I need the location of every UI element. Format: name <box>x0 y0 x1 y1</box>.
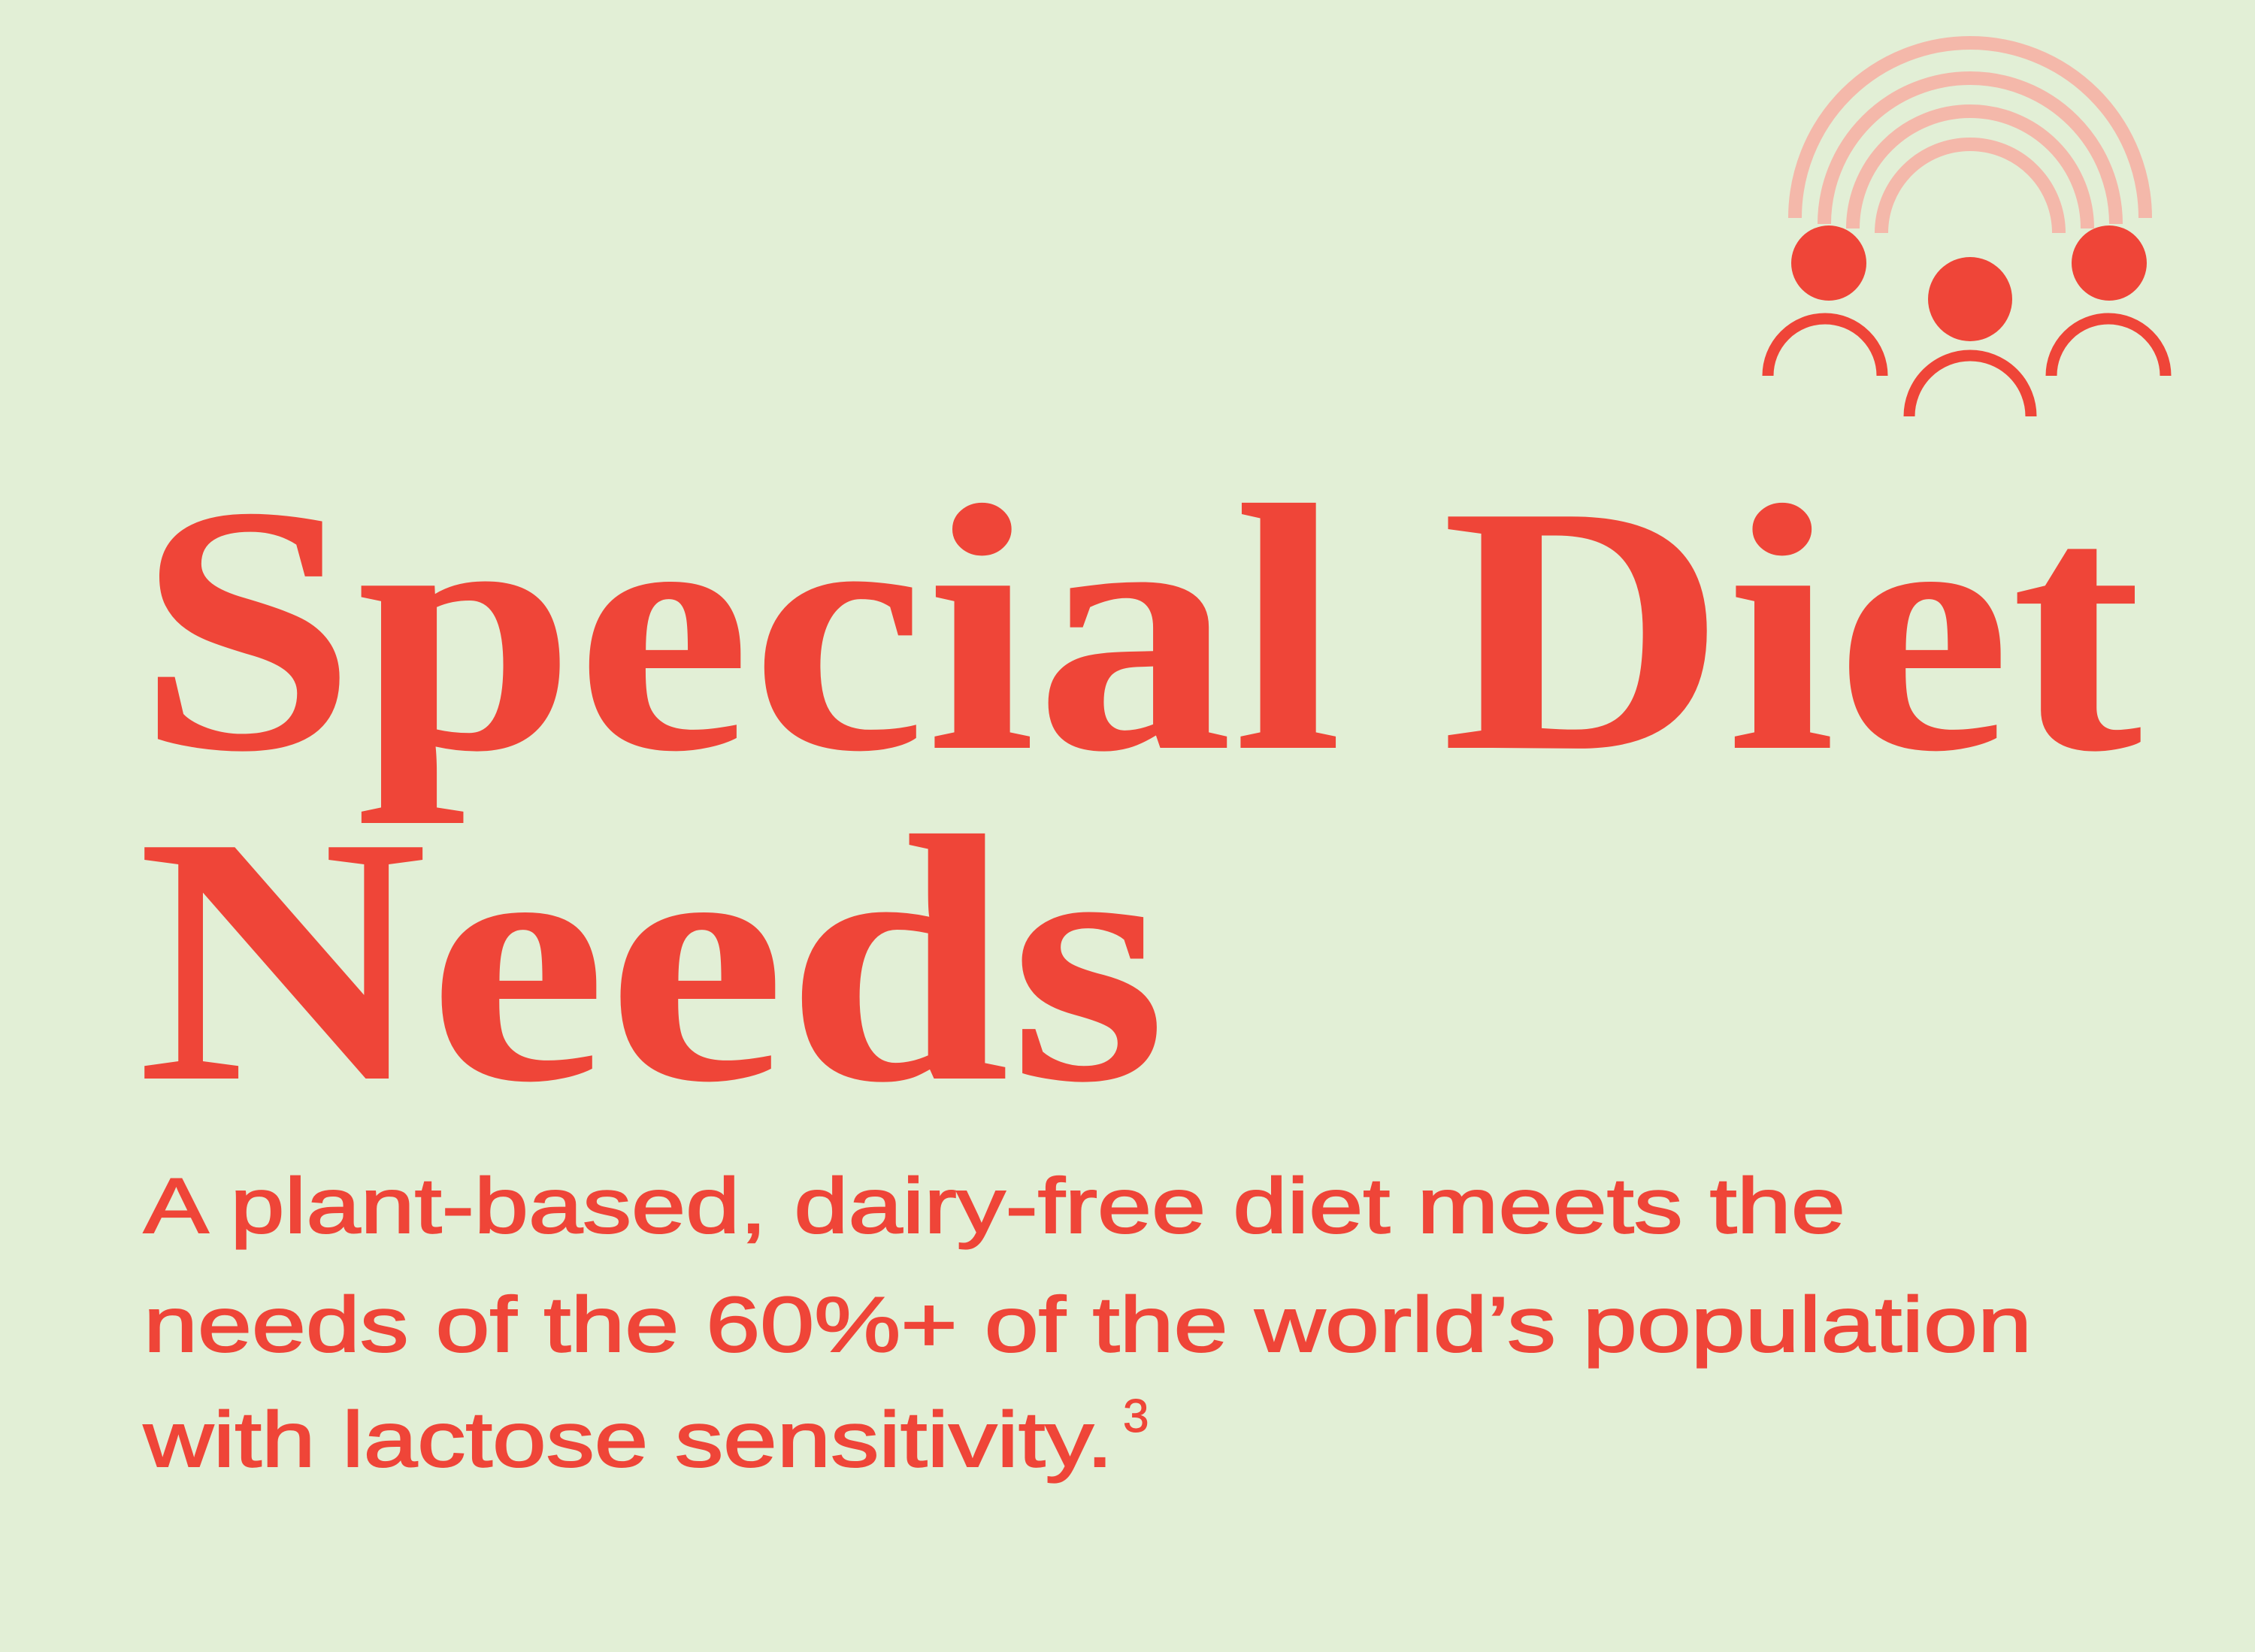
icon: rainbow with people <box>1768 43 2166 416</box>
subtitle text block: needs of the 60%+ of the world’s population <box>144 1281 2032 1369</box>
title <box>137 433 2147 1155</box>
icon: people shoulders <box>1768 319 2166 416</box>
subtitle text block: A plant-based, dairy-free diet meets the <box>144 1163 1845 1250</box>
icon: people heads <box>1791 225 2147 341</box>
subtitle text block: with lactose sensitivity. <box>143 1396 1113 1484</box>
subtitle text block <box>143 1163 2032 1484</box>
title: Special Diet <box>137 433 2147 825</box>
icon: rainbow arcs <box>1795 43 2145 233</box>
subtitle text block: 3 <box>1123 1390 1149 1442</box>
title: Needs <box>137 764 1167 1155</box>
